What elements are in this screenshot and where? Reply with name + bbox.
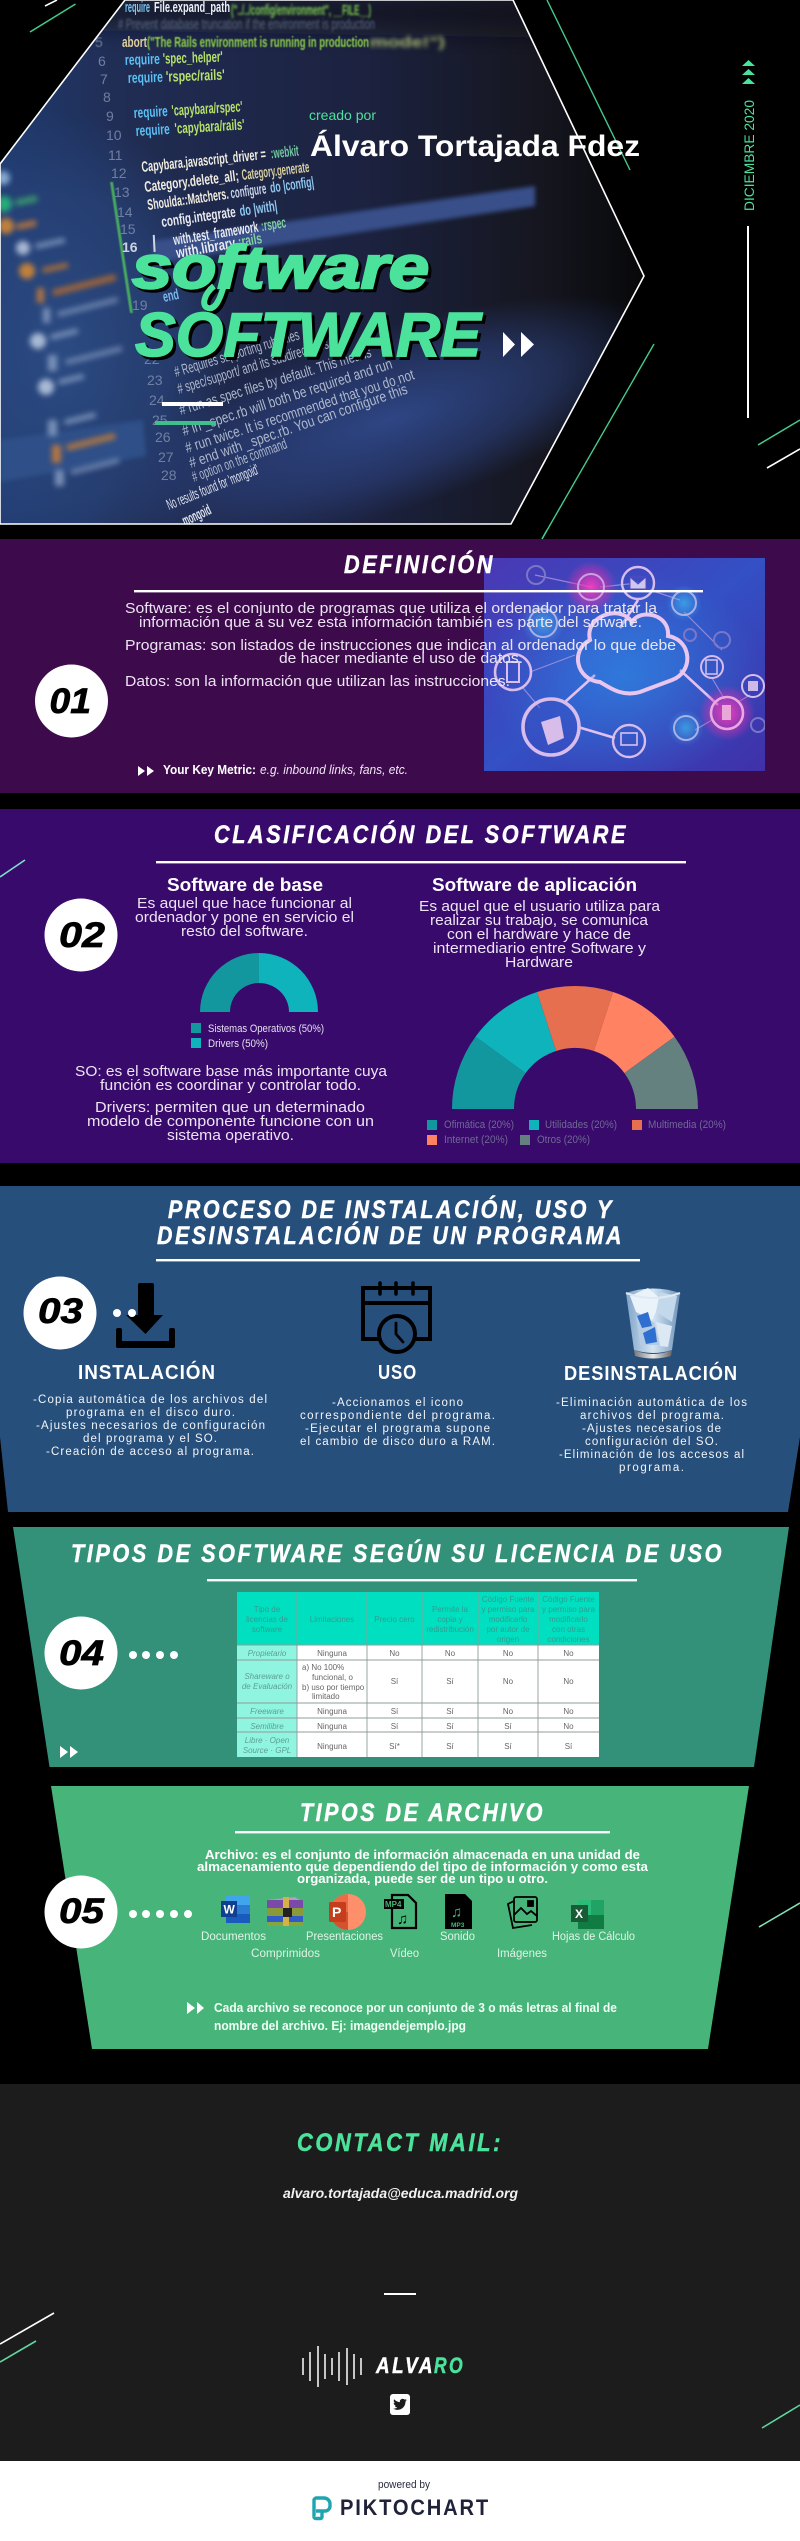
- table header: redistribución: [426, 1625, 474, 1634]
- labels: file types: Documentos: [201, 1931, 266, 1943]
- table rows: No: [389, 1649, 400, 1658]
- icon: mp3 file: ♫: [451, 1904, 462, 1921]
- icon: word: [221, 1896, 250, 1923]
- text: software de aplicacion: Hardware: [505, 955, 573, 971]
- table rows: Sí*: [389, 1742, 400, 1751]
- text: desinstalacion: archivos del programa.: [580, 1410, 724, 1422]
- labels: file types: Imágenes: [497, 1948, 547, 1960]
- code lines: config.integrate: [160, 204, 237, 231]
- text: software de aplicacion: con el hardware y hace de: [447, 927, 631, 943]
- code line numbers: 22: [144, 351, 160, 367]
- title: SOFTWARE: SOFTWARE: [135, 301, 483, 370]
- code lines: with.library: [174, 235, 237, 262]
- heading: tipos de archivo: TIPOS DE ARCHIVO: [300, 1799, 545, 1827]
- text: instalacion: programa en el disco duro.: [66, 1407, 235, 1419]
- table rows: No: [445, 1649, 456, 1658]
- icon: images: [508, 1897, 537, 1928]
- code lines: require: [135, 121, 170, 140]
- text: software de aplicacion: intermediario entre Software y: [433, 941, 647, 957]
- heading: uso: USO: [378, 1362, 417, 1384]
- badge 02: [44, 898, 118, 972]
- dots: [129, 1910, 192, 1918]
- code lines: 'capybara/rails': [174, 116, 245, 138]
- legend: software de aplicacion: Utilidades (20%): [545, 1119, 617, 1131]
- labels: file types: Presentaciones: [306, 1931, 383, 1943]
- table header: con otras: [552, 1625, 585, 1634]
- heading: proceso: DESINSTALACIÓN DE UN PROGRAMA: [157, 1221, 624, 1250]
- image: cloud network: [484, 558, 765, 771]
- icon: mp4 file: MP4: [385, 1900, 402, 1909]
- right accent lines: [758, 420, 800, 468]
- code lines: [118, 0, 445, 530]
- key metric: Your Key Metric:: [163, 763, 256, 777]
- legend: software de aplicacion: Ofimática (20%): [444, 1119, 514, 1131]
- table header: Precio cero: [374, 1615, 415, 1624]
- table header: origen: [497, 1635, 519, 1644]
- text: instalacion: -Copia automática de los archivos del: [33, 1394, 267, 1406]
- table: licencias: [237, 1592, 599, 1757]
- accent line right: [762, 2405, 800, 2428]
- table rows: limitado: [312, 1692, 340, 1701]
- badge 05: [44, 1876, 118, 1948]
- table rows: b) uso por tiempo: [302, 1683, 365, 1692]
- table rows: No: [503, 1677, 514, 1686]
- text: instalacion: del programa y el SO.: [83, 1433, 217, 1445]
- code line numbers: 14: [117, 204, 133, 220]
- code line numbers: 24: [149, 392, 165, 408]
- chart: software de base donut: [200, 953, 318, 1012]
- text: uso: -Ejecutar el programa supone: [305, 1423, 490, 1435]
- text: archivo: organizada, puede ser de un tipo u otro.: [297, 1871, 548, 1886]
- heading: instalacion: INSTALACIÓN: [78, 1360, 216, 1384]
- logo: waveform: [303, 2346, 361, 2387]
- table rows: Source · GPL: [243, 1746, 291, 1755]
- text: software de aplicacion: [419, 899, 661, 971]
- powered by text: powered by: [378, 2479, 430, 2491]
- table header: condiciones: [547, 1635, 590, 1644]
- heading: desinstalacion: DESINSTALACIÓN: [564, 1361, 738, 1385]
- code lines: require: [133, 103, 168, 122]
- logo: alvaro: RO: [434, 2353, 465, 2378]
- code lines: # run twice. It is recommended that you do not: [183, 366, 417, 457]
- table header: por autor de: [486, 1625, 530, 1634]
- text: so and drivers: función es coordinar y controlar todo.: [100, 1078, 361, 1094]
- text: so and drivers: sistema operativo.: [167, 1128, 294, 1144]
- table header: Código Fuente: [542, 1595, 595, 1604]
- text: definitions: Programas: son listados de instrucciones que indican al ordenador lo que debe: [125, 638, 676, 654]
- table rows: Ninguna: [317, 1742, 347, 1751]
- badge 03: [24, 1276, 96, 1350]
- code lines: Category.delete_all;: [143, 168, 240, 196]
- dots: [113, 1309, 121, 1317]
- text: software de base: Es aquel que hace funcionar al: [137, 896, 352, 912]
- table rows: Sí: [391, 1677, 399, 1686]
- code sidebar: [0, 171, 122, 486]
- icon: powerpoint: [329, 1894, 366, 1930]
- labels: file types: [201, 1931, 635, 1960]
- code lines: # run as spec files by default. This means: [177, 344, 373, 419]
- table rows: Sí: [391, 1707, 399, 1716]
- panel: definicion: [0, 530, 800, 793]
- text: instalacion: -Ajustes necesarios de configuración: [36, 1420, 265, 1432]
- text: desinstalacion: [556, 1397, 747, 1474]
- key metric: e.g. inbound links, fans, etc.: [260, 763, 408, 777]
- code lines: # end with _spec.rb. You can configure this: [187, 381, 410, 472]
- icon: mp3 file: MP3: [451, 1922, 465, 1929]
- text: archivo: [197, 1847, 649, 1886]
- long green accent lines: [542, 0, 654, 539]
- table rows: No: [503, 1649, 514, 1658]
- table header: Código Fuente: [482, 1595, 535, 1604]
- heading: proceso: PROCESO DE INSTALACIÓN, USO Y: [168, 1195, 614, 1224]
- text: uso: -Accionamos el icono: [332, 1397, 463, 1409]
- table header: modificarlo: [489, 1615, 528, 1624]
- code lines: end: [161, 286, 180, 306]
- text: desinstalacion: configuración del SO.: [585, 1436, 718, 1448]
- code lines: configure: [229, 180, 267, 202]
- text: uso: correspondiente del programa.: [300, 1410, 495, 1422]
- code lines: Shoulda::Matchers.: [146, 186, 230, 214]
- creado por: creado por: [309, 107, 376, 123]
- icon: mp3 file: [445, 1894, 472, 1929]
- icon: excel: [571, 1900, 604, 1929]
- code lines: ("../../config/environment", __FILE__): [231, 2, 371, 19]
- title: software: software: [135, 237, 432, 304]
- code lines: do |config|: [269, 174, 315, 197]
- chart: software de aplicacion donut: [452, 986, 698, 1109]
- table rows: Sí: [446, 1707, 455, 1716]
- labels: file types: Hojas de Cálculo: [552, 1931, 635, 1943]
- table rows: Sí: [391, 1722, 399, 1731]
- heading: contact mail: CONTACT MAIL:: [297, 2129, 503, 2157]
- code lines: abort: [122, 34, 147, 51]
- code lines: :webkit: [270, 143, 300, 162]
- table rows: Ninguna: [317, 1707, 347, 1716]
- title: SOFTWARE: SOFTWARE: [138, 304, 486, 373]
- code lines: # Prevent database truncation if the environment is production: [118, 16, 375, 33]
- table header: licencias de: [246, 1615, 288, 1624]
- badge 01: 01: [50, 682, 91, 721]
- icon: recycle bin: [626, 1288, 680, 1358]
- table rows: Sí: [446, 1742, 455, 1751]
- text: instalacion: -Creación de acceso al programa.: [46, 1446, 254, 1458]
- legend: software de base: Drivers (50%): [208, 1038, 268, 1050]
- icon: calendar clock: [363, 1283, 430, 1352]
- note: file extension: [187, 2000, 617, 2033]
- text: so and drivers: modelo de componente funcione con un: [87, 1114, 374, 1130]
- labels: file types: Comprimidos: [251, 1948, 320, 1960]
- table rows: No: [563, 1677, 574, 1686]
- dots: [129, 1651, 178, 1659]
- table rows: Sí: [504, 1742, 513, 1751]
- top-left accent lines: [30, 0, 76, 32]
- heading: proceso: [157, 1195, 624, 1250]
- panel: clasificacion: [0, 809, 800, 1163]
- code line numbers: 11: [108, 147, 123, 163]
- code line numbers: 26: [155, 429, 171, 445]
- note: file extension: Cada archivo se reconoce por un conjunto de 3 o más letras al final de: [214, 2000, 617, 2015]
- text: uso: el cambio de disco duro a RAM.: [300, 1436, 495, 1448]
- table rows: funcional, o: [312, 1673, 353, 1682]
- icon: mp4 file: [384, 1895, 416, 1928]
- logo: alvaro: ALVA: [375, 2353, 435, 2378]
- table rows: No: [563, 1649, 574, 1658]
- key metric: [138, 763, 408, 777]
- heading: definicion: DEFINICIÓN: [344, 550, 495, 579]
- badge 04: 04: [59, 1634, 104, 1673]
- table header: copia y: [437, 1615, 463, 1624]
- code lines: require: [128, 69, 163, 87]
- text: so and drivers: SO: es el software base más importante cuya: [75, 1064, 388, 1080]
- code line numbers: 16: [122, 239, 138, 255]
- table rows: No: [503, 1707, 514, 1716]
- code lines: do |with|: [238, 198, 278, 220]
- text: uso: [300, 1397, 495, 1448]
- code lines: Category.generate: [241, 159, 310, 184]
- code lines: No results found for 'mongoid': [164, 461, 261, 514]
- note: file extension: nombre del archivo. Ej: imagendejemplo.jpg: [214, 2018, 466, 2033]
- code line numbers: 19: [132, 297, 148, 313]
- icon: winrar: [267, 1897, 303, 1926]
- code line numbers: 10: [106, 127, 122, 143]
- text: so and drivers: [75, 1064, 388, 1144]
- accent line right: [759, 1903, 800, 1927]
- code lines: :rspec: [260, 214, 287, 235]
- panel: powered by: [0, 2461, 800, 2541]
- text: definitions: información que a su vez esta información también es parte del sofware.: [139, 615, 642, 631]
- table rows: Sí: [446, 1722, 455, 1731]
- code line numbers: 5: [95, 34, 103, 50]
- badge 04: [44, 1616, 118, 1690]
- legend: software de aplicacion: Multimedia (20%): [648, 1119, 726, 1131]
- text: desinstalacion: -Eliminación de los accesos al: [559, 1449, 744, 1461]
- decorative bars: [155, 402, 223, 425]
- code lines: 'spec_helper': [163, 49, 223, 68]
- text: definitions: Datos: son la información que utilizan las instrucciones.: [125, 674, 510, 690]
- code line numbers: 27: [158, 449, 174, 465]
- labels: file types: Vídeo: [390, 1948, 419, 1960]
- table rows: Semilibre: [250, 1722, 284, 1731]
- code lines: ("The Rails environment is running in production: [147, 34, 369, 51]
- code line numbers: 23: [147, 372, 163, 388]
- text: instalacion: [33, 1394, 267, 1458]
- code lines: mongoid: [180, 502, 214, 530]
- text: definitions: de hacer mediante el uso de datos.: [279, 651, 523, 667]
- table rows: Sí: [446, 1677, 455, 1686]
- code lines: # option on the command: [190, 436, 289, 486]
- badge 01: [35, 664, 108, 738]
- table header: y permiso para: [482, 1605, 535, 1614]
- legend: software de base: Sistemas Operativos (50%): [208, 1023, 324, 1035]
- code line numbers: 25: [152, 412, 168, 428]
- text: so and drivers: Drivers: permiten que un determinado: [95, 1100, 365, 1116]
- panel: licencias: [13, 1527, 789, 1767]
- table header: modificarlo: [549, 1615, 588, 1624]
- text: desinstalacion: -Eliminación automática de los: [556, 1397, 747, 1409]
- legend: software de base: [191, 1023, 324, 1050]
- table rows: Ninguna: [317, 1649, 347, 1658]
- code lines: 'capybara/rspec': [171, 98, 243, 120]
- text: archivo: Archivo: es el conjunto de información almacenada en una unidad de: [205, 1847, 640, 1862]
- hero header: [0, 0, 800, 595]
- table rows: a) No 100%: [302, 1663, 344, 1672]
- panel: footer contact: [0, 2084, 800, 2461]
- icon: twitter: [390, 2394, 410, 2415]
- table rows: Sí: [504, 1722, 513, 1731]
- triangles up: [742, 60, 755, 84]
- code line numbers: 12: [111, 165, 127, 181]
- author name: Álvaro Tortajada Fdez: [310, 129, 640, 163]
- table rows: Shareware o: [244, 1672, 290, 1681]
- text: software de aplicacion: Es aquel que el usuario utiliza para: [419, 899, 661, 915]
- icon: double arrow: [503, 332, 534, 357]
- code lines: 'rspec/rails': [166, 67, 225, 86]
- code lines: mode!"): [370, 34, 445, 51]
- table header: [246, 1595, 596, 1644]
- date vertical: DICIEMBRE 2020: [742, 100, 757, 211]
- code line numbers: [95, 34, 177, 483]
- vertical line: [747, 226, 749, 418]
- badge 05: 05: [59, 1892, 105, 1931]
- code lines: with.test_framework: [171, 219, 260, 249]
- code line numbers: 6: [98, 53, 106, 69]
- hero photo: blurred code editor: [0, 0, 643, 524]
- text: archivo: almacenamiento que dependiendo del tipo de información y como esta: [197, 1859, 649, 1874]
- icon: double arrow: [60, 1746, 78, 1758]
- legend: software de aplicacion: Internet (20%): [444, 1134, 508, 1146]
- code lines: # Requires supporting ruby files: [172, 327, 301, 381]
- text: software de aplicacion: realizar su trabajo, se comunica: [430, 913, 649, 929]
- text: desinstalacion: -Ajustes necesarios de: [582, 1423, 721, 1435]
- code lines: require: [125, 51, 160, 69]
- table rows: No: [563, 1722, 574, 1731]
- code line numbers: 7: [100, 71, 108, 87]
- table header: Permite la: [432, 1605, 469, 1614]
- contact email: alvaro.tortajada@educa.madrid.org: [283, 2185, 518, 2201]
- legend: software de aplicacion: Otros (20%): [537, 1134, 590, 1146]
- table rows: Libre · Open: [245, 1736, 290, 1745]
- table header: Limitaciones: [310, 1615, 354, 1624]
- labels: file types: Sonido: [440, 1931, 475, 1943]
- title: software: software: [132, 234, 429, 301]
- icon: word: W: [224, 1902, 236, 1916]
- panel: tipos de archivo: [44, 1786, 749, 2049]
- text: desinstalacion: programa.: [619, 1462, 684, 1474]
- table header: Tipo de: [254, 1605, 281, 1614]
- table header: software: [252, 1625, 283, 1634]
- icon: download: [116, 1283, 175, 1348]
- code lines: :rails: [237, 230, 263, 251]
- icon: excel: X: [575, 1907, 583, 1921]
- hexagon outline: [0, 0, 644, 524]
- table rows: [242, 1649, 574, 1755]
- table rows: No: [563, 1707, 574, 1716]
- table header: y permiso para: [542, 1605, 596, 1614]
- icon: powerpoint: P: [332, 1904, 341, 1920]
- badge 02: 02: [59, 916, 106, 955]
- text: software de base: resto del software.: [181, 924, 308, 940]
- heading: software de base: Software de base: [167, 875, 323, 895]
- table rows: de Evaluación: [242, 1682, 293, 1691]
- table rows: Sí: [565, 1742, 573, 1751]
- badge 03: 03: [38, 1292, 84, 1331]
- table rows: Propietario: [248, 1649, 287, 1658]
- code line numbers: 15: [120, 221, 136, 237]
- text: definitions: Software: es el conjunto de programas que utiliza el ordenador para tratar la: [125, 601, 658, 617]
- code line numbers: 13: [114, 184, 130, 200]
- code lines: # spec/support/ and its subdirectories.: [175, 335, 333, 398]
- code lines: Capybara.javascript_driver =: [141, 146, 267, 176]
- legend: software de aplicacion: [427, 1119, 726, 1146]
- code line numbers: 28: [161, 467, 177, 483]
- logo: piktochart word: PIKTOCHART: [340, 2495, 490, 2520]
- text: software de base: [135, 896, 354, 940]
- text: software de base: ordenador y pone en servicio el: [135, 910, 354, 926]
- code line numbers: 8: [103, 89, 111, 105]
- table rows: Freeware: [250, 1707, 284, 1716]
- icon: mp4 file: ♫: [397, 1911, 408, 1928]
- accent lines left: [0, 2313, 54, 2362]
- code line numbers: 9: [106, 108, 114, 124]
- logo: piktochart mark: [314, 2498, 330, 2519]
- panel: proceso: [0, 1186, 800, 1512]
- heading: clasificacion: CLASIFICACIÓN DEL SOFTWARE: [214, 820, 628, 849]
- heading: software de aplicacion: Software de aplicación: [432, 875, 637, 895]
- code lines: # in _spec.rb will both be required and run: [180, 356, 394, 440]
- text: definitions: [125, 601, 676, 690]
- table rows: Ninguna: [317, 1722, 347, 1731]
